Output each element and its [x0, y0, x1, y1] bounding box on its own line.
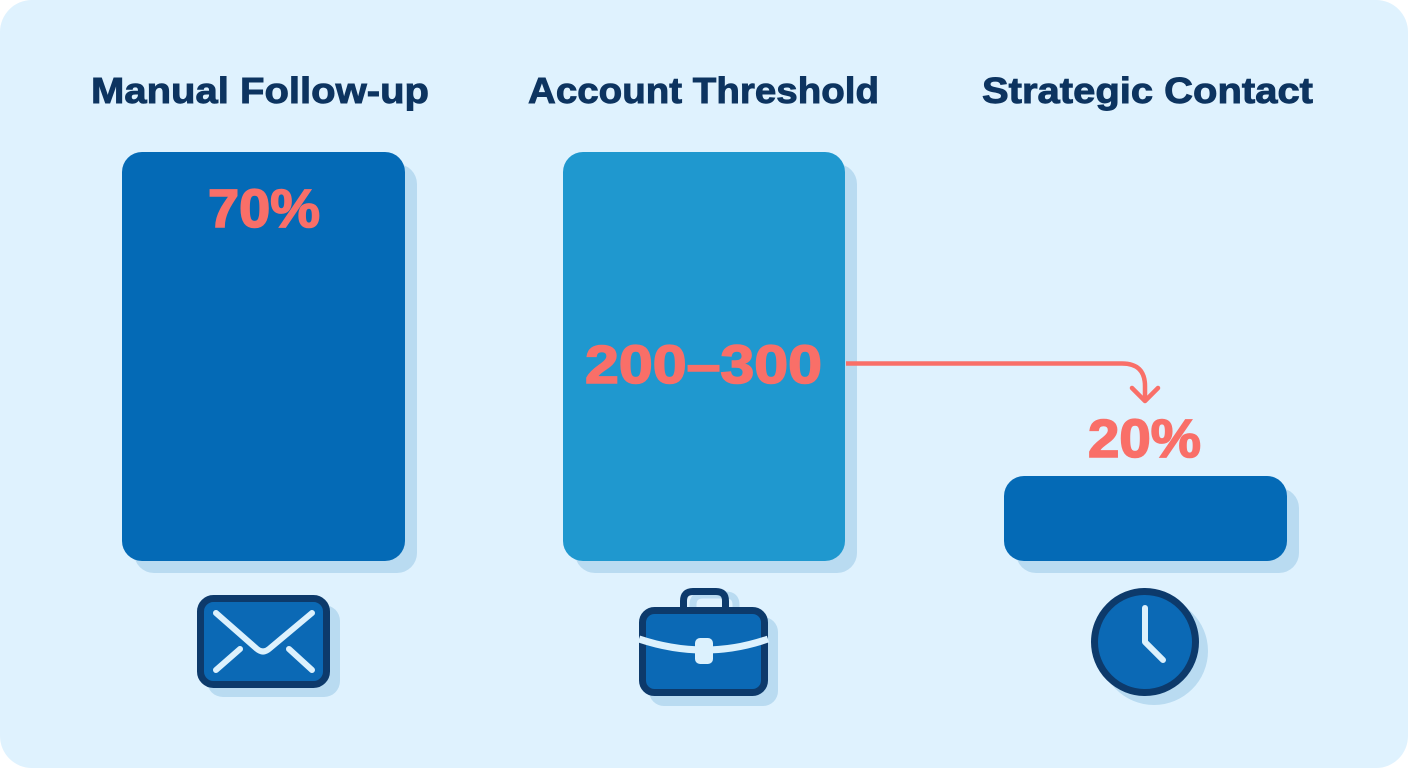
icon: briefcase	[639, 592, 778, 706]
value: 70%: 70%	[208, 179, 320, 239]
heading: manual follow-up: Manual Follow-up	[91, 70, 429, 111]
icon: envelope	[200, 598, 340, 697]
panel: account threshold	[528, 70, 879, 706]
bar: strategic contact	[1004, 476, 1299, 573]
bar: account threshold	[563, 152, 857, 573]
arrow: threshold to strategic contact	[846, 364, 1158, 401]
heading: account threshold: Account Threshold	[528, 70, 879, 111]
icon: clock	[1094, 592, 1208, 705]
panel: strategic contact	[982, 70, 1313, 705]
value: 200-300: 200–300	[585, 335, 822, 395]
value: 20%: 20%	[1088, 409, 1201, 469]
panel: manual follow-up	[91, 70, 429, 697]
heading: strategic contact: Strategic Contact	[982, 70, 1313, 111]
bar: manual follow-up	[122, 152, 417, 573]
